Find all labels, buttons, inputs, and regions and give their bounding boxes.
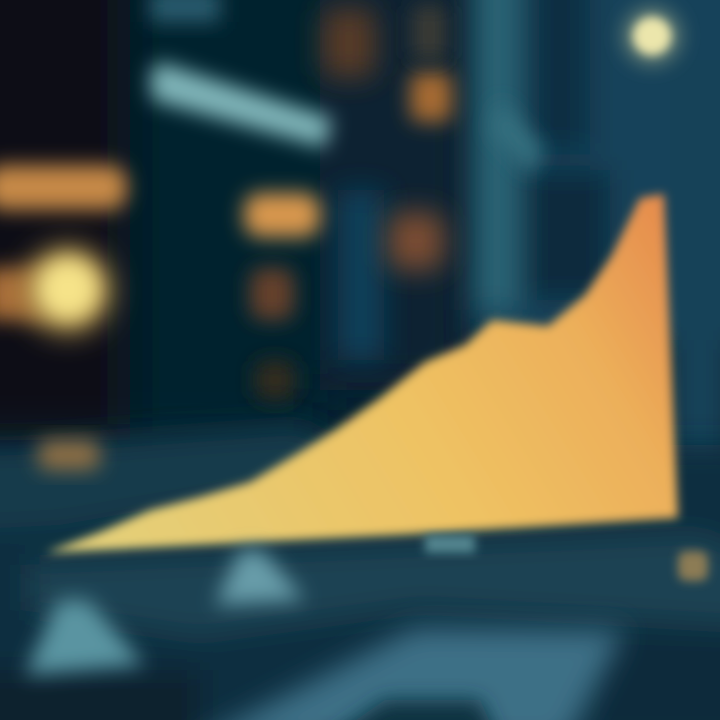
icon: pale strip under chart — [425, 535, 475, 553]
icon: dim top window — [412, 5, 446, 60]
panel: teal buildings right — [338, 0, 720, 520]
icon: pale cone left — [25, 600, 145, 675]
icon: brown top window — [322, 8, 376, 78]
panel: dark buildings left — [0, 0, 470, 440]
panel: light floor slab — [190, 628, 625, 720]
icon: brown window right — [388, 212, 444, 270]
icon: dim orange window — [250, 268, 294, 320]
icon: pale top bar — [150, 0, 220, 22]
icon: glowing lamp — [24, 246, 112, 334]
icon: pale light bar — [150, 62, 332, 148]
icon: small amber marker — [678, 551, 708, 581]
icon: orange window left — [0, 165, 127, 210]
icon: dim lower window — [255, 360, 295, 400]
icon: dark foreground shape — [320, 700, 500, 720]
icon: bright star — [624, 8, 680, 64]
icon: pale cone centre — [215, 550, 305, 605]
icon: pale diagonal beam — [490, 100, 545, 175]
icon: orange window centre — [244, 193, 320, 237]
icon: orange top window — [410, 72, 452, 122]
icon: orange band behind glowing lamp — [0, 268, 50, 320]
icon: small amber reflection — [38, 440, 100, 470]
chart: rising area — [45, 194, 678, 553]
panel: ground — [0, 425, 720, 720]
